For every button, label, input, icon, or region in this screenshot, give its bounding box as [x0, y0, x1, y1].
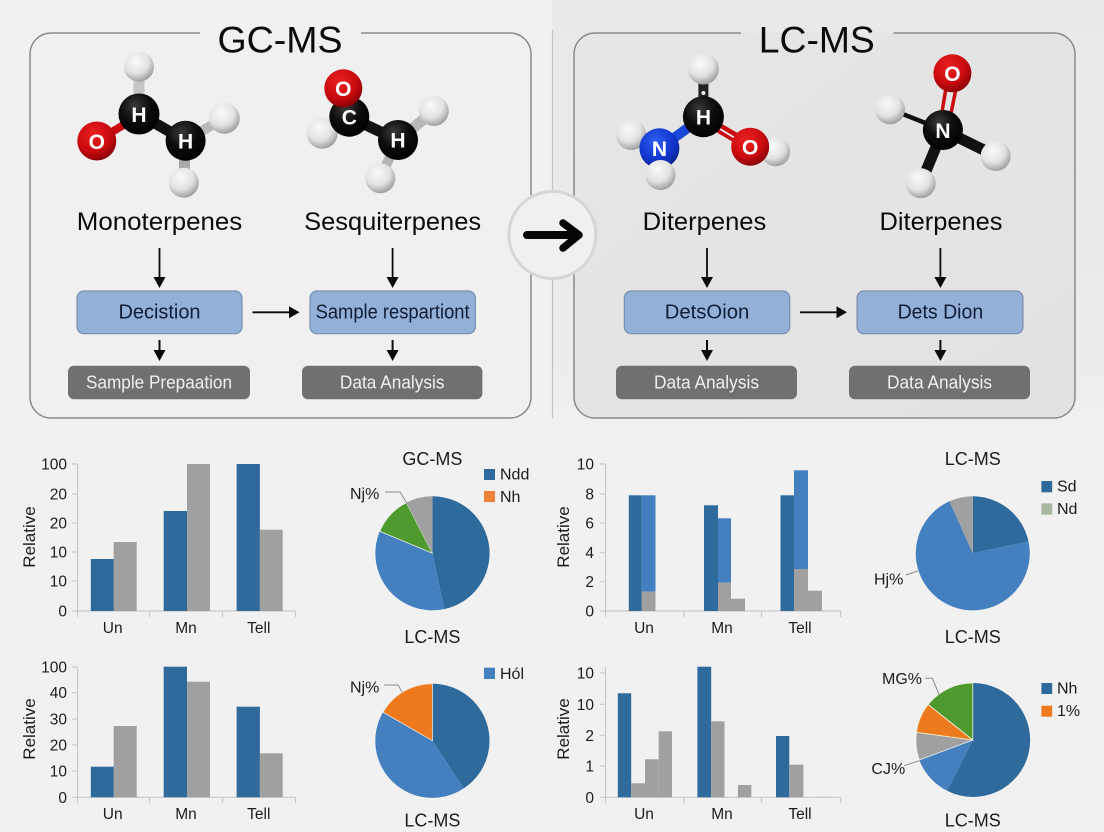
pie title: LC-MS: LC-MS — [404, 627, 460, 647]
box: DetsOion: DetsOion — [665, 302, 749, 324]
pie chart: LC-MS top right — [874, 449, 1077, 610]
icon: molecule 3: N — [652, 138, 667, 161]
pie chart: GC-MS — [350, 449, 529, 610]
arrow: small down right — [934, 340, 946, 361]
bar chart: top left: Relative — [20, 506, 39, 568]
bar chart: bottom left: Tell — [247, 806, 270, 823]
bar chart: top right: Un — [634, 620, 654, 637]
bar chart: top left: 10 — [50, 574, 67, 590]
bar chart: bottom right: 1 — [585, 758, 594, 776]
label: Diterpenes right: Diterpenes — [880, 208, 1002, 236]
bar chart: bottom right: 0 — [585, 790, 594, 807]
bar chart: bottom left: 20 — [50, 738, 67, 754]
label: Diterpenes left: Diterpenes — [643, 208, 766, 236]
icon: molecule 2: O — [335, 78, 351, 101]
pie chart: LC-MS bottom right: MG% — [882, 671, 922, 688]
bar chart: bottom right: 10 — [577, 666, 594, 682]
pie chart: LC-MS bottom left: LC-MS — [404, 811, 460, 831]
arrow: center circle — [509, 192, 596, 278]
pie chart: LC-MS bottom left — [350, 666, 524, 831]
box: Data Analysis left — [616, 366, 797, 399]
arrow: small down left — [154, 340, 166, 361]
arrow: Diterpenes left down — [701, 248, 713, 288]
bar chart: top right: Relative — [554, 506, 573, 568]
bar chart: bottom right: 10 — [577, 697, 594, 714]
box: Sample Prepaation: Sample Prepaation — [86, 372, 232, 392]
pie chart: LC-MS bottom right: CJ% — [871, 761, 905, 778]
icon: molecule 1: O — [89, 131, 105, 154]
bar chart: bottom left: Mn — [175, 806, 197, 823]
pie title: LC-MS right: LC-MS — [945, 627, 1001, 647]
pie chart: GC-MS: Ndd — [500, 466, 529, 484]
bar chart: bottom right: Mn — [711, 806, 733, 823]
heading: LC-MS: LC-MS — [759, 19, 875, 61]
icon: molecule 3 — [616, 54, 790, 190]
box: Decistion — [77, 291, 242, 334]
icon: molecule 3: H — [696, 106, 711, 130]
bar chart: top right: 0 — [585, 604, 594, 620]
pie chart: LC-MS bottom right: 1% — [1057, 703, 1080, 720]
box: Data Analysis — [302, 366, 482, 399]
bar chart: top right — [554, 456, 841, 637]
arrow: small down left — [701, 340, 713, 361]
box: Data Analysis right: Data Analysis — [887, 372, 992, 392]
pie chart: LC-MS top right: Sd — [1057, 479, 1077, 496]
bar chart: bottom left: 30 — [50, 712, 67, 728]
bar chart: top left: 20 — [50, 516, 67, 532]
arrow: box to box — [800, 306, 847, 318]
box: Decistion: Decistion — [118, 302, 200, 324]
icon: molecule 4: O — [944, 63, 961, 86]
bar chart: bottom left: 40 — [50, 685, 67, 702]
arrow: small down right — [387, 340, 399, 361]
panel: LC-MS — [574, 19, 1075, 418]
bar chart: top right: 6 — [585, 516, 594, 532]
bar chart: bottom right: Un — [634, 806, 654, 823]
bar chart: top right: 2 — [585, 574, 594, 591]
bar chart: bottom right: 2 — [585, 728, 594, 745]
pie chart: LC-MS top right: Nd — [1057, 501, 1077, 518]
box: Data Analysis: Data Analysis — [340, 372, 445, 392]
bar chart: bottom left: Un — [103, 806, 123, 823]
pie chart: GC-MS: Nj% — [350, 486, 379, 503]
icon: molecule 4 — [875, 54, 1011, 198]
bar chart: top left: Tell — [247, 620, 270, 637]
pie chart: LC-MS top right: Hj% — [874, 571, 903, 588]
panel: GC-MS — [30, 19, 531, 418]
arrow: Diterpenes right down — [934, 248, 946, 288]
bar chart: top right: 4 — [585, 545, 594, 562]
bar chart: top left: 10 — [50, 544, 67, 562]
icon: molecule 2: C — [342, 106, 357, 130]
icon: molecule 4: N — [935, 120, 950, 143]
icon: molecule 3: O — [742, 136, 758, 160]
bar chart: top right: Tell — [788, 620, 812, 637]
arrow: Monoterpenes down — [154, 248, 166, 288]
box: Data Analysis left: Data Analysis — [654, 372, 759, 392]
bar chart: bottom right: Relative — [554, 698, 573, 760]
box: DetsOion — [624, 291, 790, 334]
pie chart: GC-MS: Nh — [500, 489, 520, 506]
bar chart: top left: 0 — [58, 604, 67, 620]
icon: molecule 1 — [77, 52, 240, 198]
pie chart: LC-MS bottom right — [871, 671, 1080, 831]
icon: molecule 1: H — [131, 104, 147, 127]
box: Sample respartiont — [310, 291, 475, 334]
bar chart: bottom left — [20, 660, 296, 823]
bar chart: top right: 10 — [577, 456, 594, 474]
bar chart: bottom left: 10 — [50, 764, 67, 780]
box: Sample Prepaation — [68, 366, 250, 399]
bar chart: top left: Mn — [175, 620, 197, 637]
arrow: box to box — [252, 306, 300, 318]
bar chart: bottom left: 100 — [41, 660, 67, 676]
icon: molecule 1: H — [178, 130, 193, 154]
box: Dets Dion: Dets Dion — [898, 302, 983, 324]
bar chart: top right: 8 — [585, 486, 594, 504]
pie chart: LC-MS bottom left: Nj% — [350, 680, 379, 697]
bar chart: bottom left: Relative — [20, 698, 39, 760]
pie chart: GC-MS: GC-MS — [402, 449, 462, 469]
pie chart: LC-MS top right: LC-MS — [945, 449, 1001, 469]
bar chart: bottom left: 0 — [58, 790, 67, 807]
bar chart: top right: Mn — [711, 620, 733, 637]
box: Dets Dion — [857, 291, 1023, 334]
pie chart: LC-MS bottom left: Hól — [500, 666, 524, 683]
label: Sesquiterpenes: Sesquiterpenes — [304, 208, 481, 236]
bar chart: top left — [20, 456, 296, 637]
icon: molecule 2: H — [390, 130, 406, 152]
bar chart: top left: 100 — [41, 456, 67, 474]
bar chart: top left: 20 — [50, 486, 67, 504]
heading: GC-MS: GC-MS — [218, 19, 342, 61]
bar chart: bottom right — [554, 666, 841, 823]
box: Sample respartiont: Sample respartiont — [316, 302, 470, 324]
bar chart: top left: Un — [103, 620, 123, 637]
bar chart: bottom right: Tell — [788, 806, 812, 823]
box: Data Analysis right — [849, 366, 1030, 399]
label: Monoterpenes: Monoterpenes — [77, 208, 242, 236]
arrow: Sesquiterpenes down — [387, 248, 399, 288]
pie chart: LC-MS bottom right: LC-MS — [945, 811, 1001, 831]
pie chart: LC-MS bottom right: Nh — [1057, 680, 1077, 697]
icon: molecule 2 — [307, 69, 449, 193]
